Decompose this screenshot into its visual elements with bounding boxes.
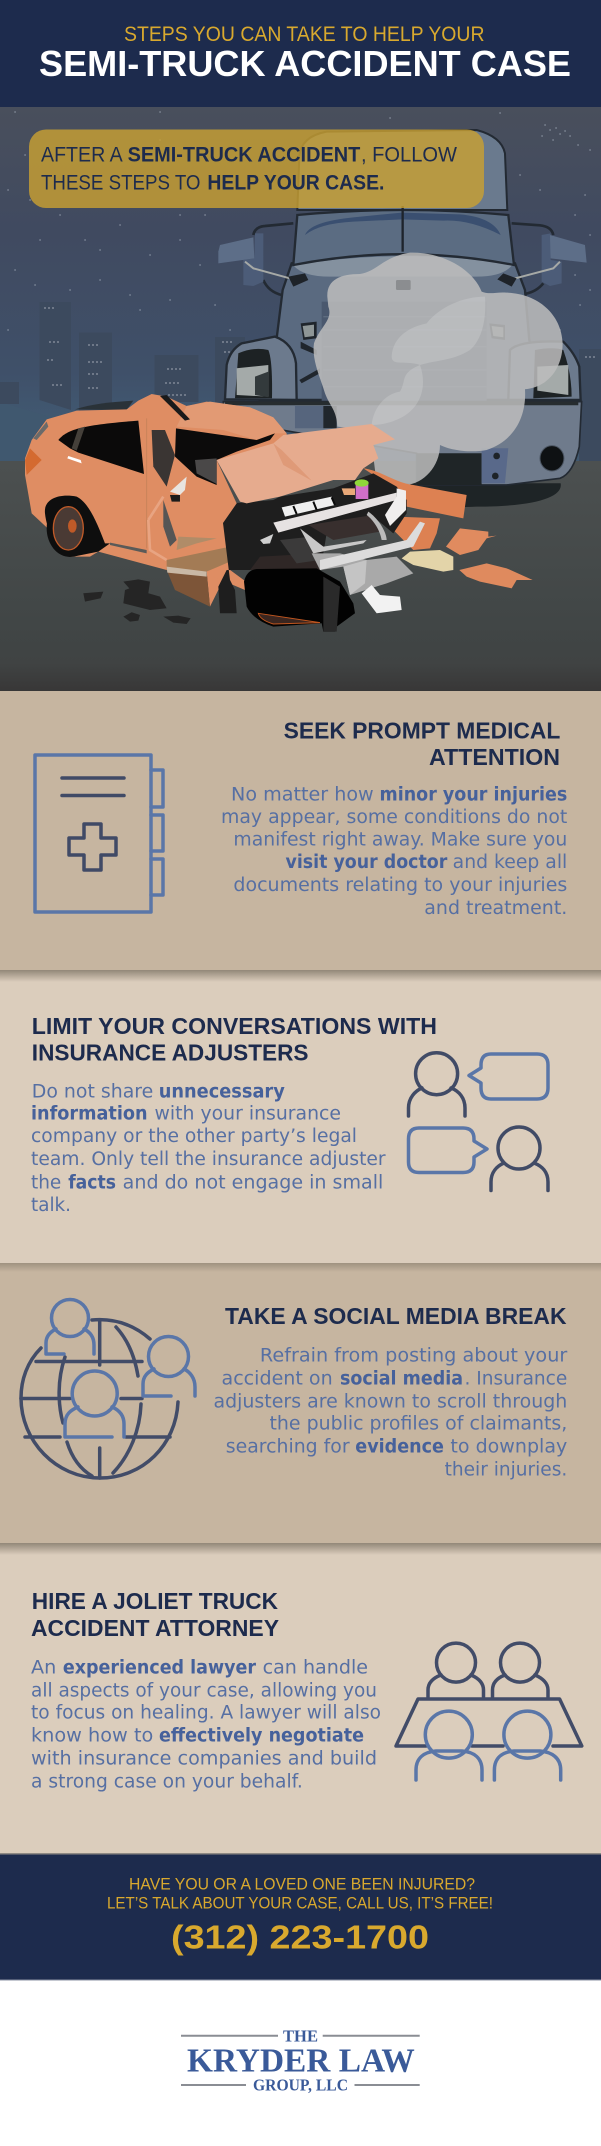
grill teeth: [282, 497, 335, 517]
car interior: [175, 428, 275, 485]
text block: documents relating to your injuries: [233, 875, 567, 896]
text block: company or the other party’s legal: [31, 1126, 357, 1147]
panel: seek medical attention: [0, 691, 601, 970]
text block: information: [31, 1104, 148, 1124]
text block: with insurance companies and build: [31, 1748, 377, 1769]
text block: a strong case on your behalf.: [31, 1771, 303, 1792]
callout: intro: HELP YOUR CASE.: [207, 172, 384, 195]
text block: talk.: [31, 1195, 71, 1216]
text block: No matter how: [231, 784, 374, 806]
text block: experienced lawyer: [63, 1657, 257, 1678]
mirror frames: [253, 223, 553, 295]
right fender: [508, 341, 581, 400]
text block: Do not share: [32, 1081, 153, 1102]
icon: two people talking: [408, 1053, 548, 1190]
text block: effectively negotiate: [159, 1725, 364, 1746]
windshield: [293, 210, 514, 265]
text block: accident on: [222, 1368, 333, 1389]
text block: team. Only tell the insurance adjuster: [31, 1149, 386, 1170]
white bumper: [273, 493, 397, 533]
text block: and do not engage in small: [123, 1172, 383, 1194]
mirror arms: [245, 262, 560, 279]
text block: with your insurance: [154, 1104, 341, 1124]
panel: hire an attorney: [0, 1543, 601, 1854]
left mirror: [218, 233, 263, 286]
text block: manifest right away. Make sure you: [233, 830, 567, 850]
heading: [32, 1013, 437, 1066]
side mirror: [170, 477, 187, 495]
bumper: [223, 402, 582, 485]
callout: intro: , FOLLOW: [361, 144, 457, 166]
text block: all aspects of your case, allowing you: [31, 1680, 377, 1701]
text block: and treatment.: [424, 898, 567, 919]
text block: . Insurance: [464, 1368, 567, 1389]
call to action text: HAVE YOU OR A LOVED ONE BEEN INJURED?: [129, 1874, 475, 1893]
text block: Refrain from posting about your: [260, 1345, 568, 1366]
car body: [25, 394, 287, 607]
left headlight: [235, 349, 272, 398]
title: SEMI-TRUCK ACCIDENT CASE: [39, 43, 571, 84]
can: [342, 488, 355, 495]
engine pile: [218, 473, 407, 613]
text block: the public profiles of claimants,: [270, 1414, 567, 1434]
car roof shade: [75, 401, 133, 410]
wrecked car: [25, 394, 287, 624]
text block: the: [31, 1172, 61, 1194]
right mirror: [542, 233, 587, 286]
heading: [31, 1588, 279, 1641]
panel: limit conversations: [0, 970, 601, 1263]
subtitle: STEPS YOU CAN TAKE TO HELP YOUR: [124, 23, 484, 46]
text block: evidence: [355, 1436, 444, 1458]
text block: [221, 784, 567, 919]
heading: HIRE A JOLIET TRUCK: [32, 1588, 278, 1614]
text block: visit your doctor: [286, 852, 448, 873]
text block: facts: [68, 1172, 116, 1194]
callout: intro: SEMI-TRUCK ACCIDENT: [128, 144, 360, 166]
heading: [284, 718, 560, 770]
crumpled door panel: [167, 570, 210, 607]
right headlight: [533, 348, 572, 398]
text block: know how to: [31, 1725, 153, 1746]
truck: [218, 130, 587, 507]
smoke cloud: [314, 253, 563, 485]
car front wreckage: [217, 424, 533, 632]
orange strip: [363, 468, 467, 518]
text block: adjusters are known to scroll through: [214, 1391, 567, 1412]
cab roof: [297, 130, 507, 210]
text block: and keep all: [453, 852, 567, 873]
text block: can handle: [263, 1657, 368, 1678]
heading: ATTENTION: [429, 744, 560, 770]
call to action text: [107, 1874, 493, 1912]
text block: [31, 1657, 381, 1792]
silver parts: [300, 528, 367, 553]
heading: LIMIT YOUR CONVERSATIONS WITH: [32, 1013, 437, 1039]
grille: [322, 302, 487, 405]
text block: to focus on healing. A lawyer will also: [31, 1702, 381, 1724]
truck body: [260, 254, 543, 400]
footer call to action: [0, 1853, 601, 1980]
hood: [217, 424, 395, 503]
icon: globe with people: [21, 1300, 195, 1478]
city skyline: [0, 302, 601, 461]
heading: TAKE A SOCIAL MEDIA BREAK: [225, 1303, 567, 1329]
icon: medical binder: [35, 755, 163, 912]
rear wheel: [45, 496, 110, 557]
callout: intro: [29, 130, 484, 208]
stars: [8, 112, 590, 345]
heading: INSURANCE ADJUSTERS: [32, 1040, 309, 1066]
call to action text: LET’S TALK ABOUT YOUR CASE, CALL US, IT’S FREE!: [107, 1893, 493, 1912]
text block: An: [31, 1657, 56, 1678]
hero illustration: truck crash scene: [0, 107, 601, 691]
text block: [31, 1081, 386, 1216]
side windows: [58, 421, 144, 474]
text block: may appear, some conditions do not: [221, 807, 567, 828]
logo: The Kryder Law Group: KRYDER LAW: [187, 2043, 415, 2080]
heading: ACCIDENT ATTORNEY: [31, 1615, 279, 1641]
left fender: [225, 337, 297, 400]
debris pieces: [446, 528, 497, 555]
text block: social media: [340, 1368, 463, 1389]
text block: to downplay: [450, 1436, 567, 1458]
text block: their injuries.: [445, 1460, 567, 1480]
logo: The Kryder Law Group: THE: [283, 2027, 318, 2046]
phone number: (312) 223-1700: [171, 1918, 429, 1955]
callout: intro: THESE STEPS TO: [41, 172, 200, 195]
heading: SEEK PROMPT MEDICAL: [284, 718, 560, 744]
header banner: [0, 0, 601, 107]
text block: searching for: [226, 1436, 350, 1458]
orange crumple: [393, 517, 440, 550]
callout: intro: AFTER A: [41, 144, 123, 166]
truck shadow: [407, 483, 561, 507]
icon: people at a table: [396, 1643, 582, 1780]
text block: unnecessary: [159, 1081, 285, 1102]
crushed tire: [244, 568, 355, 632]
logo: The Kryder Law Group: [0, 1980, 601, 2146]
road debris: [83, 579, 191, 624]
panel: social media break: [0, 1263, 601, 1543]
text block: [214, 1345, 568, 1480]
text block: minor your injuries: [380, 784, 567, 806]
logo: The Kryder Law Group: GROUP, LLC: [253, 2076, 348, 2095]
